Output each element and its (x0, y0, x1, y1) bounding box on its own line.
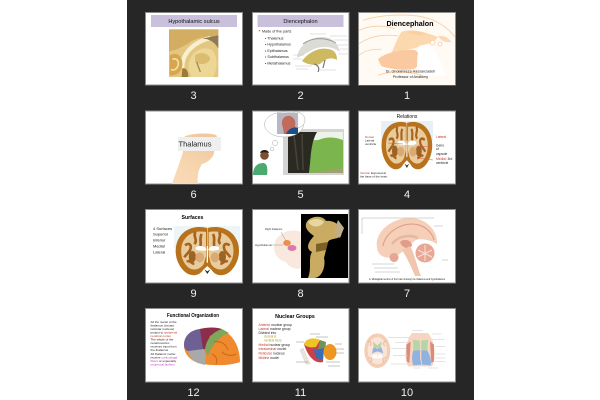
slide 4 coronal section (381, 121, 433, 169)
slide 9 bullet list: Inferior (153, 238, 166, 242)
slide 11 title: Nuclear Groups (275, 314, 315, 320)
slide 2 bullet list: • Subthalamus (265, 55, 289, 59)
slide 11 nuclei list: Lateral nuclear group (258, 327, 291, 331)
slide 3: hypothalamic sulcus (146, 12, 242, 85)
slide 11 thalamic nuclei diagram (296, 334, 344, 366)
slide 2 bullet list (259, 29, 291, 65)
slide 4 right labels: Lateral (436, 135, 446, 139)
slide 1 presenter: Dr. Gholamreza Hassanzadeh (386, 70, 435, 74)
slide 7 caption: A. Midsagittal section of the brain showing the thalamus and hypothalamus (369, 278, 446, 281)
slide 5: thinking person (252, 111, 349, 184)
page number 3: 3 (190, 90, 197, 102)
slide 2 brain diagram (293, 34, 348, 72)
slide 1: title slide (358, 12, 456, 85)
slide 12 body text: All the nuclei of the (150, 320, 177, 324)
slide 2 bullet list: • Hypothalamus (265, 43, 291, 47)
slide 2: diencephalon parts (252, 12, 349, 85)
slide 11 nuclei list: Intralaminar nuclei (258, 347, 286, 351)
page number 1: 1 (404, 90, 410, 102)
slide 1 title: Diencephalon (386, 19, 434, 28)
slide 12 body text: receives input from (150, 344, 177, 348)
slide 12 body text: reticular nucleus) (150, 327, 174, 331)
slide 11 nuclei list: ventral tiers (264, 338, 282, 342)
slide 7: sagittal brain (358, 210, 456, 283)
slide 6: thalamus card (146, 111, 242, 184)
page number 9: 9 (190, 288, 197, 300)
slide 4 title: Relations (397, 114, 418, 120)
slide 4 right labels: Genu (436, 144, 444, 148)
page number 7: 7 (404, 288, 410, 300)
slide 2 bullet list: • Thalamus (265, 36, 284, 40)
slide 12 body text (150, 320, 177, 366)
slide 9 bullet list (153, 226, 172, 254)
slide 3 brain photo (169, 29, 218, 77)
page number 8: 8 (297, 288, 304, 300)
slide 6 word card: Thalamus (178, 140, 212, 148)
slide 2 bullet list: • Epithalamus (265, 49, 288, 53)
slide 1 presenter (386, 70, 435, 79)
page number 12: 12 (187, 387, 200, 399)
slide 4: relations (358, 111, 456, 184)
slide 11 nuclei list: Anterior nuclear group (258, 323, 292, 327)
slide 7 sagittal brain (362, 218, 448, 276)
slide 9 bullet list: Lateral (153, 250, 165, 254)
slide 4 right labels (436, 135, 452, 165)
page number 4: 4 (404, 189, 410, 201)
slide 12 body text: receive corticofugal (150, 356, 177, 360)
slide 9 coronal section (174, 226, 240, 275)
slide 11 nuclei list: Divided into (258, 331, 276, 335)
slide 6 hand (172, 134, 217, 184)
slide 4 right labels: Medial: 3rd (436, 157, 452, 161)
slide 8 dissection photo (301, 214, 348, 278)
slide 10: horizontal brain sections (358, 308, 456, 382)
slide 9: surfaces (146, 210, 242, 283)
slide 5 person (253, 150, 269, 175)
slide 11 nuclei list (258, 323, 292, 360)
slide 11 nuclei list: Reticular nucleus (258, 352, 285, 356)
slide 12 body text: project to ipsilateral (150, 330, 177, 334)
page number 2: 2 (297, 90, 304, 102)
slide 1 presenter: Professor of Anatomy (393, 75, 428, 79)
slide 3 title banner: Hypothalamic sulcus (168, 19, 220, 25)
slide 12 body text: cerebrocortex (150, 341, 170, 345)
slide 9 bullet list: Medial (153, 244, 165, 248)
slide 8 head illustration: Hypothalamus (255, 243, 272, 247)
slide 12 body text: reciprocal fashion (150, 362, 175, 366)
slide 12 title: Functional Organization (167, 313, 219, 319)
slide 12 body text: the thalamus (150, 348, 169, 352)
slide 4 left labels (360, 135, 388, 178)
slide 9 bullet list: Superior (153, 232, 169, 236)
slide 1 anatomical background (359, 13, 455, 85)
slide 11: nuclear groups (252, 308, 349, 382)
slide 8: thalamus location (252, 210, 349, 283)
slide 4 left labels: Lateral (365, 138, 375, 142)
slide 4 left labels: Ventral: Exposed at (360, 171, 386, 175)
slide 2 title banner: Diencephalon (283, 19, 318, 25)
slide 9 title: Surfaces (182, 215, 204, 221)
slide 11 nuclei list: dorsal & (264, 334, 277, 338)
slide 12 body text: All thalamic nuclei (150, 352, 176, 356)
slide 5 landscape photo (283, 129, 344, 175)
slide 10 small section (364, 333, 390, 368)
slide 12 body text: The whole of the (150, 338, 174, 342)
slide 4 right labels: ventricle (436, 161, 448, 165)
slide 12: functional organization (146, 308, 242, 382)
slide 2 bullet list: • Metathalamus (265, 61, 291, 65)
page number 10: 10 (401, 387, 413, 399)
slide 5 thought bubble (264, 112, 305, 151)
slide 9 bullet list: 4 Surfaces (153, 226, 172, 231)
slide 11 nuclei list: Medial nuclear group (258, 343, 290, 347)
page number 5: 5 (297, 189, 304, 201)
slide 10 enlarged section (388, 331, 445, 368)
slide 4 left labels: Dorsal (365, 135, 374, 139)
slide 4 left labels: ventricle (365, 142, 377, 146)
page number 6: 6 (190, 189, 197, 201)
slide 8 head illustration (255, 227, 301, 269)
slide 4 right labels: of (436, 147, 439, 151)
page number 11: 11 (295, 387, 306, 399)
slide 4 right labels: capsule (436, 152, 448, 156)
dark sorter background (127, 0, 474, 400)
slide 12 body text: fibers or especially (150, 359, 177, 363)
slide 11 nuclei list: Midline nuclei (258, 356, 279, 360)
slide 12 lobed brain (184, 328, 240, 365)
slide 12 body text: thalamus (except (150, 324, 174, 328)
slide 4 left labels: the base of the brain (360, 174, 388, 178)
slide 8 head illustration: Right thalamus (265, 227, 283, 231)
slide 2 bullet list: Made of five parts (262, 29, 291, 33)
slide 12 body text: cerebral cortex (150, 334, 171, 338)
